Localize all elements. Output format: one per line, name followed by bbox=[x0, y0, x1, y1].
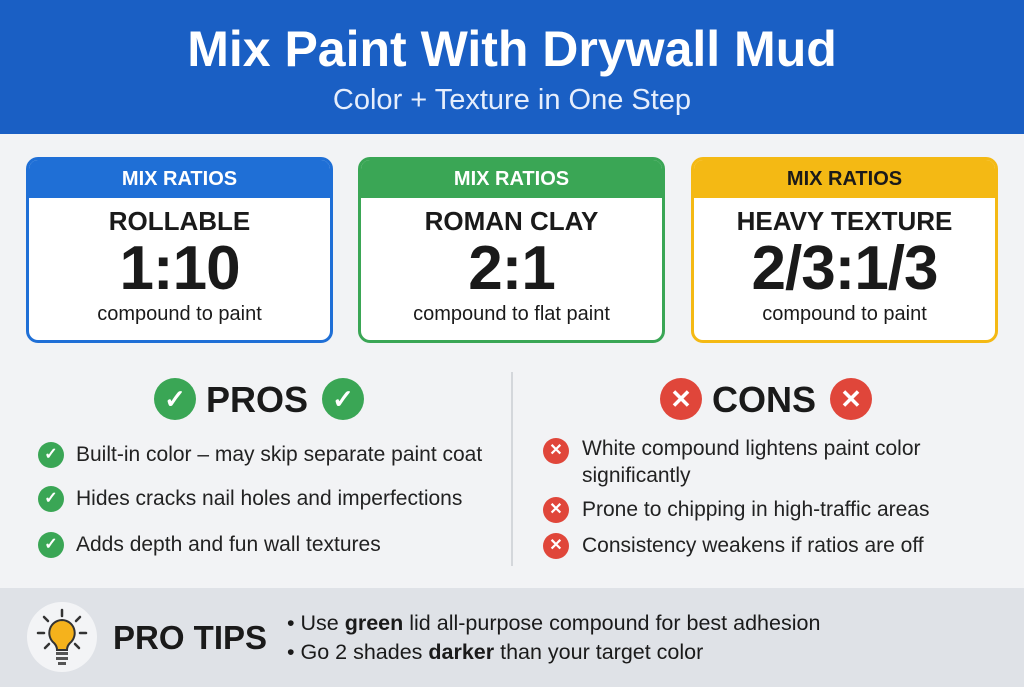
card: rollable: compound to paint bbox=[97, 303, 262, 325]
panel: pros bbox=[38, 378, 482, 558]
pros item 3: Adds depth and fun wall textures bbox=[76, 533, 381, 556]
card: heavy texture: MIX RATIOS bbox=[787, 168, 902, 190]
card: roman clay: 2:1 bbox=[468, 234, 555, 303]
pros item 1: Built-in color – may skip separate paint coat bbox=[76, 443, 482, 466]
title: Mix Paint With Drywall Mud bbox=[187, 21, 837, 77]
cons item 2: ✕ bbox=[549, 501, 563, 518]
card: roman clay bbox=[358, 157, 665, 343]
cons item 3: Consistency weakens if ratios are off bbox=[582, 534, 924, 557]
pros item 1: ✓ bbox=[44, 446, 58, 463]
pros heading: PROS bbox=[206, 379, 308, 420]
card: heavy texture bbox=[691, 157, 998, 343]
pros item 2: ✓ bbox=[44, 490, 58, 507]
cons heading: ✕ bbox=[670, 384, 692, 414]
cons heading: CONS bbox=[712, 379, 816, 420]
pros item 3: ✓ bbox=[44, 536, 58, 553]
pros heading: ✓ bbox=[164, 384, 186, 414]
card: roman clay: compound to flat paint bbox=[413, 303, 610, 325]
cons heading: ✕ bbox=[840, 384, 862, 414]
card: rollable: ROLLABLE bbox=[109, 206, 250, 236]
card: rollable: 1:10 bbox=[119, 234, 240, 303]
pros heading: ✓ bbox=[332, 384, 354, 414]
header banner bbox=[0, 0, 1024, 134]
card: roman clay: ROMAN CLAY bbox=[425, 206, 598, 236]
card: rollable: MIX RATIOS bbox=[122, 168, 237, 190]
cons item 2: Prone to chipping in high-traffic areas bbox=[582, 498, 929, 521]
cons item 1 bbox=[543, 437, 921, 487]
cons item 3: ✕ bbox=[549, 537, 563, 554]
tips text: • Use green lid all-purpose compound for best adhesion bbox=[287, 611, 820, 635]
card: heavy texture: compound to paint bbox=[762, 303, 927, 325]
cons item 1: ✕ bbox=[549, 442, 563, 459]
pros item 2: Hides cracks nail holes and imperfections bbox=[76, 487, 462, 510]
tips text bbox=[287, 611, 820, 664]
cons heading bbox=[660, 378, 872, 420]
card: heavy texture: 2/3:1/3 bbox=[751, 234, 938, 303]
icon: light bulb bbox=[27, 602, 97, 672]
card: roman clay: MIX RATIOS bbox=[454, 168, 569, 190]
panel: pro tips bbox=[0, 588, 1024, 687]
cons item 1: White compound lightens paint color bbox=[582, 437, 921, 460]
card: rollable bbox=[26, 157, 333, 343]
tips text: • Go 2 shades darker than your target color bbox=[287, 640, 703, 664]
pro tips heading: PRO TIPS bbox=[113, 619, 267, 656]
panel: cons bbox=[543, 378, 929, 559]
pros heading bbox=[154, 378, 364, 420]
cons item 1: significantly bbox=[582, 464, 691, 487]
card: heavy texture: HEAVY TEXTURE bbox=[737, 206, 952, 236]
subtitle: Color + Texture in One Step bbox=[333, 84, 691, 116]
